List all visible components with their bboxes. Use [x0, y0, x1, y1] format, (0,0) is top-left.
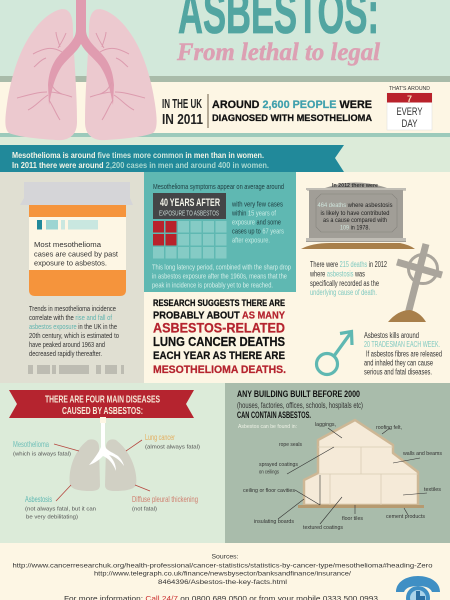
house labels: ceiling or floor cavities — [243, 488, 295, 494]
text: latency period: in asbestos exposure after the 1960s, means that the — [152, 272, 287, 280]
heading: (houses, factories, offices, schools, hospitals etc) — [237, 401, 363, 410]
callout: research statement: PROBABLY ABOUT AS MANY — [153, 310, 285, 322]
callout: 40 years after: EXPOSURE TO ASBESTOS — [159, 208, 219, 218]
text: 215 deaths: There were 215 deaths in 2012 — [310, 260, 387, 269]
banner: men vs women: Mesothelioma is around five times more common in men than in women. — [12, 150, 264, 160]
icon: calendar: EVERY — [396, 106, 423, 118]
icon: small lungs — [70, 417, 136, 491]
icon: calendar: THAT'S AROUND — [389, 86, 430, 92]
panel: symptoms: Mesothelioma symptoms appear on average around — [153, 182, 284, 191]
ribbon heading — [9, 390, 194, 418]
text: latency cases: with very few cases — [231, 200, 283, 208]
label: mesothelioma: Mesothelioma — [13, 439, 49, 449]
house labels: sprayed coatings — [259, 462, 298, 468]
stat: in the UK in 2011: IN 2011 — [162, 111, 203, 128]
subtitle: From lethal to legal — [176, 39, 380, 66]
label: asbestosis: Asbestosis — [25, 494, 52, 504]
text: latency cases: exposure and some — [232, 218, 281, 226]
text: sources: http://www.telegraph.co.uk/finance/newsbysector/banksandfinance/insurance/ — [94, 572, 351, 578]
label: asbestosis: (not always fatal, but it can — [25, 506, 96, 512]
text: 215 deaths: specifically recorded as the — [310, 279, 379, 288]
house labels: roofing felt, — [376, 425, 402, 431]
house labels: on ceilings — [259, 470, 279, 476]
icon: tombstone: In 2012 there were — [332, 183, 378, 189]
text: latency cases: cases up to 67 years — [232, 226, 284, 236]
panel: left beige — [0, 170, 144, 383]
stat: in the UK in 2011: AROUND 2,600 PEOPLE WERE — [212, 99, 372, 111]
ribbon heading: CAUSED BY ASBESTOS: — [62, 406, 143, 417]
callout: 40 years after: 40 YEARS AFTER — [160, 197, 220, 209]
icon: calendar: DAY — [402, 118, 418, 130]
heading: ANY BUILDING BUILT BEFORE 2000 — [237, 389, 360, 400]
icon: celtic cross — [388, 244, 442, 322]
house labels: textured coatings — [303, 525, 343, 531]
text: tradesmen — [364, 331, 442, 376]
icon: calendar — [387, 86, 432, 130]
icon: lungs — [5, 0, 157, 140]
text: latency period: This long latency period, combined with the sharp drop — [152, 262, 291, 272]
text: tradesmen: Asbestos kills around — [364, 331, 419, 340]
callout: research statement: MESOTHELIOMA DEATHS. — [153, 364, 286, 376]
text: sources: http://www.cancerresearchuk.org/health-professional/cancer-statistics/statistics-by-cancer-type/mesothelioma#heading-Zero — [12, 564, 433, 570]
connector lines — [54, 440, 150, 501]
callout: 40 years after — [153, 193, 226, 219]
house labels: insulating boards — [254, 519, 294, 525]
heading — [237, 389, 363, 420]
house labels: rope seals — [279, 442, 302, 448]
label: lung cancer: Lung cancer — [145, 432, 175, 442]
icon: pill bottle: exposure to asbestos. — [34, 260, 107, 268]
stat: in the UK in 2011: DIAGNOSED WITH MESOTHELIOMA — [212, 113, 373, 123]
icon: pill bottle — [20, 182, 133, 296]
text: latency period — [152, 262, 291, 290]
text: 215 deaths: underlying cause of death. — [310, 288, 377, 297]
callout: research statement — [153, 298, 286, 376]
label: lung cancer — [145, 432, 200, 450]
text: incidence trends: Trends in mesothelioma incidence — [29, 304, 116, 313]
icon: pill bottle: Most mesothelioma — [34, 242, 101, 249]
label: mesothelioma — [13, 439, 71, 458]
text: incidence trends: decreased rapidly thereafter. — [29, 349, 102, 358]
banner: men vs women — [0, 145, 344, 172]
text: latency cases: within 15 years of — [231, 208, 277, 218]
house labels: laggings, — [315, 422, 336, 428]
callout: research statement: LUNG CANCER DEATHS — [153, 334, 285, 349]
label: diffuse pleural thickening: Diffuse pleural thickening — [132, 494, 198, 504]
text: incidence trends: have peaked around 1963 and — [29, 340, 105, 349]
label: asbestosis — [25, 494, 96, 520]
icon: tombstone: 464 deaths where asbestosis — [318, 203, 392, 209]
panel: buildings — [225, 383, 450, 543]
text: 215 deaths: where asbestosis was — [309, 270, 365, 278]
icon: pill bottle: cases are caused by past — [34, 252, 118, 258]
barcode strip — [28, 365, 124, 374]
icon: male symbol — [316, 332, 352, 374]
text: sources — [12, 554, 433, 586]
text: incidence trends — [29, 304, 119, 358]
house labels — [243, 422, 442, 531]
house labels: cement products — [386, 514, 425, 520]
label: lung cancer: (almost always fatal) — [145, 444, 200, 450]
icon: tombstone — [301, 182, 415, 249]
leader lines — [278, 428, 427, 524]
callout: research statement: RESEARCH SUGGESTS THERE ARE — [153, 298, 285, 308]
text: 215 deaths — [309, 260, 387, 297]
icon: tombstone: as a cause compared with — [323, 218, 387, 224]
stat: in the UK in 2011: IN THE UK — [162, 97, 202, 111]
icon: telephone — [396, 576, 440, 600]
text: latency cases — [231, 200, 284, 244]
text: found in: Asbestos can be found in: — [238, 424, 297, 430]
label: diffuse pleural thickening: (not fatal) — [132, 506, 157, 512]
stat: in the UK in 2011 — [162, 94, 373, 128]
callout: research statement: EACH YEAR AS THERE ARE — [153, 350, 285, 362]
text: incidence trends: correlate with the rise and fall of — [29, 313, 113, 322]
ribbon heading: THERE ARE FOUR MAIN DISEASES — [45, 394, 160, 406]
label: diffuse pleural thickening — [132, 494, 198, 512]
waffle chart: 4 of 18 — [153, 221, 226, 258]
icon: tombstone: is likely to have contributed — [320, 211, 390, 217]
label: asbestosis: be very debilitating) — [26, 514, 78, 520]
icon: tombstone: 109 in 1978. — [340, 226, 370, 232]
text: latency cases: after exposure. — [232, 236, 270, 244]
icon: house cross-section — [298, 420, 424, 508]
house labels: walls and beams — [402, 451, 442, 457]
text: sources: 8464396/Asbestos-the-key-facts.html — [158, 580, 287, 586]
banner: men vs women: In 2011 there were around 2,200 cases in men and around 400 in women. — [12, 160, 269, 170]
panel: four diseases — [0, 383, 225, 543]
panel: right cream — [144, 172, 450, 383]
heading: CAN CONTAIN ASBESTOS. — [237, 410, 311, 420]
text: incidence trends: asbestos exposure in the UK in the — [29, 322, 117, 331]
label: mesothelioma: (which is always fatal) — [13, 452, 71, 458]
text: sources: Sources: — [212, 554, 239, 560]
icon: calendar: 7 — [407, 94, 412, 104]
text: latency period: peak in incidence is probably yet to be reached. — [152, 280, 273, 290]
text: incidence trends: 20th century, which is estimated to — [29, 331, 119, 340]
panel: symptoms — [144, 172, 296, 292]
house labels: textiles — [424, 487, 441, 493]
callout: research statement: ASBESTOS-RELATED — [153, 320, 285, 336]
house labels: floor tiles — [342, 516, 363, 522]
